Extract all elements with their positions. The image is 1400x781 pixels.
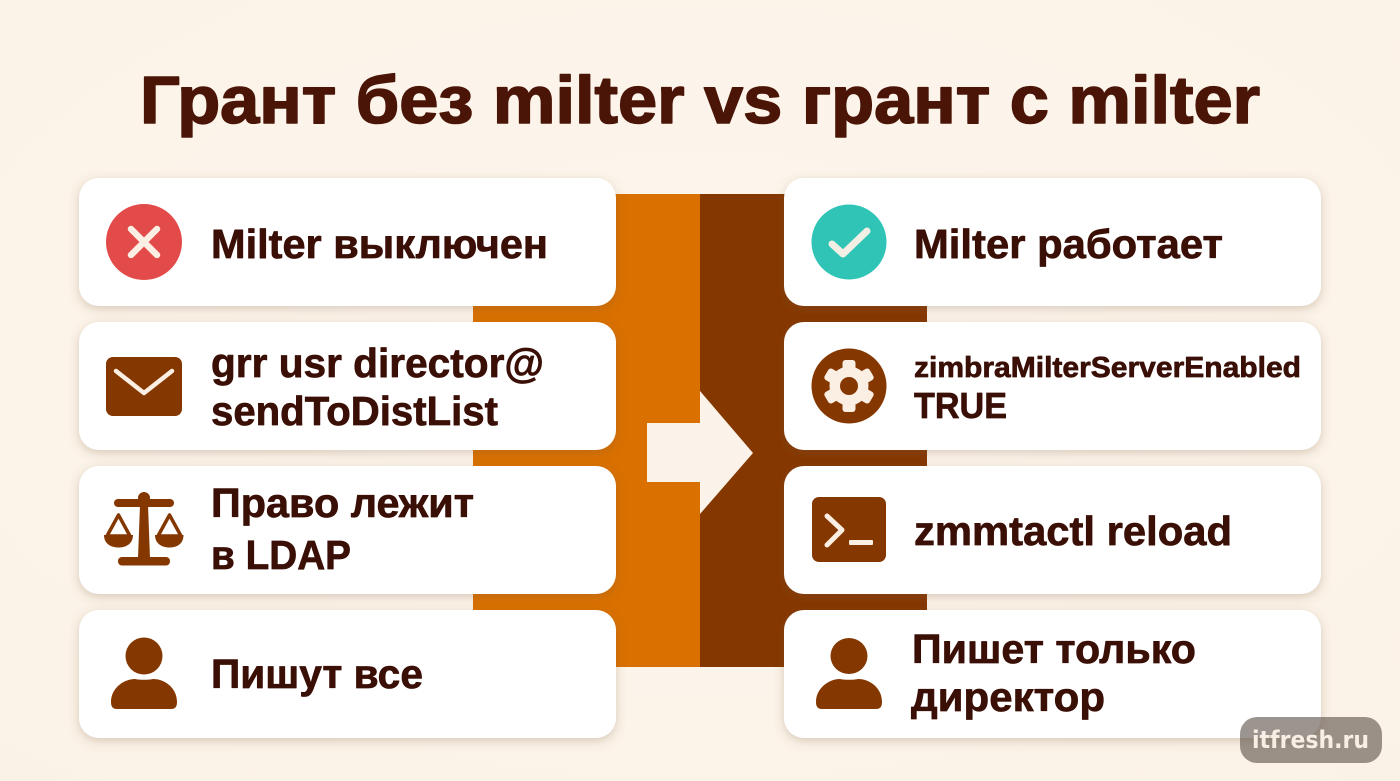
card: grant command (79, 322, 616, 450)
text: server enabled setting: TRUE (914, 385, 1007, 426)
text: only director writes: Пишет только (912, 626, 1196, 672)
icon: gear (812, 348, 886, 424)
icon: envelope (106, 357, 182, 416)
text: everyone writes: Пишут все (211, 651, 423, 697)
watermark: itfresh.ru (1252, 726, 1369, 754)
panel: right column, with milter (784, 178, 1321, 738)
watermark (1240, 717, 1382, 763)
transition band: brown after side (700, 194, 927, 667)
icon: terminal (812, 497, 886, 562)
text: milter running: Milter работает (914, 221, 1223, 267)
text: milter off: Milter выключен (211, 221, 548, 267)
icon: scales (104, 492, 184, 566)
text: server enabled setting: zimbraMilterServerEnabled (914, 352, 1301, 384)
icon: person (111, 638, 177, 709)
icon: red cross (106, 204, 182, 280)
card: server enabled setting (784, 322, 1321, 450)
icon: person (816, 638, 882, 709)
text: grant command: sendToDistList (211, 388, 498, 434)
text: right stored in LDAP: Право лежит (211, 480, 474, 526)
transition band: orange before side (473, 194, 700, 667)
card: milter off (79, 178, 616, 306)
card: milter running (784, 178, 1321, 306)
icon: teal check (812, 204, 886, 280)
text: reload command: zmmtactl reload (914, 508, 1232, 554)
arrow (647, 391, 753, 514)
card: everyone writes (79, 610, 616, 738)
panel: left column, without milter (79, 178, 616, 738)
text: right stored in LDAP: в LDAP (211, 532, 351, 578)
card: only director writes (784, 610, 1321, 738)
card: reload command (784, 466, 1321, 594)
text: grant command: grr usr director@ (211, 340, 544, 386)
card: right stored in LDAP (79, 466, 616, 594)
title: Грант без milter vs грант с milter (140, 63, 1260, 138)
text: only director writes: директор (911, 674, 1105, 720)
